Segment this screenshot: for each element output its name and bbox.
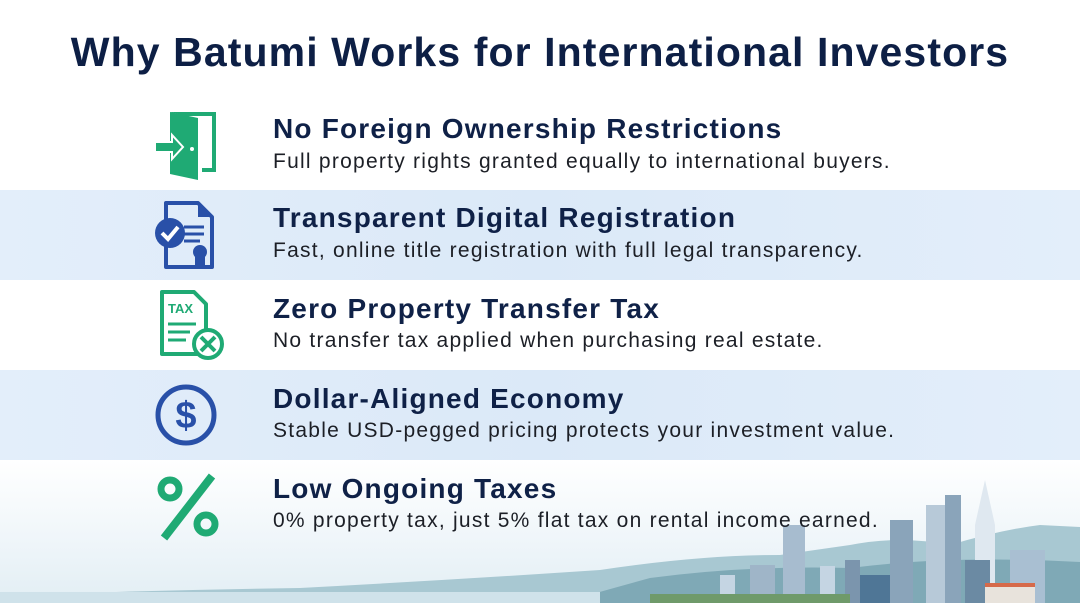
- icon: dollar coin: [156, 384, 216, 446]
- icon: tax document: [160, 290, 224, 360]
- icon: percent: [158, 474, 218, 540]
- heading: Zero Property Transfer Tax: [273, 293, 660, 324]
- icon: certificate: [155, 201, 214, 269]
- heading: Low Ongoing Taxes: [273, 473, 557, 504]
- row 2: transparent digital registration: [0, 190, 1080, 280]
- row 1: no foreign ownership restrictions: [156, 112, 891, 180]
- title: Why Batumi Works for International Investors: [71, 29, 1009, 75]
- subtitle: Fast, online title registration with full legal transparency.: [273, 239, 864, 262]
- row 5: low ongoing taxes: [158, 473, 879, 540]
- subtitle: No transfer tax applied when purchasing real estate.: [273, 329, 824, 352]
- row 3: zero property transfer tax: [160, 290, 824, 360]
- icon: tax document: TAX: [168, 301, 193, 316]
- subtitle: Full property rights granted equally to international buyers.: [273, 150, 891, 173]
- icon: dollar coin: $: [175, 395, 197, 437]
- skyline illustration: [0, 480, 1080, 603]
- heading: Dollar-Aligned Economy: [273, 383, 625, 414]
- heading: Transparent Digital Registration: [273, 202, 736, 233]
- row 4: dollar-aligned economy: [0, 370, 1080, 460]
- subtitle: Stable USD-pegged pricing protects your investment value.: [273, 419, 895, 442]
- heading: No Foreign Ownership Restrictions: [273, 113, 782, 144]
- background bottom gradient: [0, 460, 1080, 603]
- icon: door entry: [156, 112, 216, 180]
- subtitle: 0% property tax, just 5% flat tax on rental income earned.: [273, 509, 879, 532]
